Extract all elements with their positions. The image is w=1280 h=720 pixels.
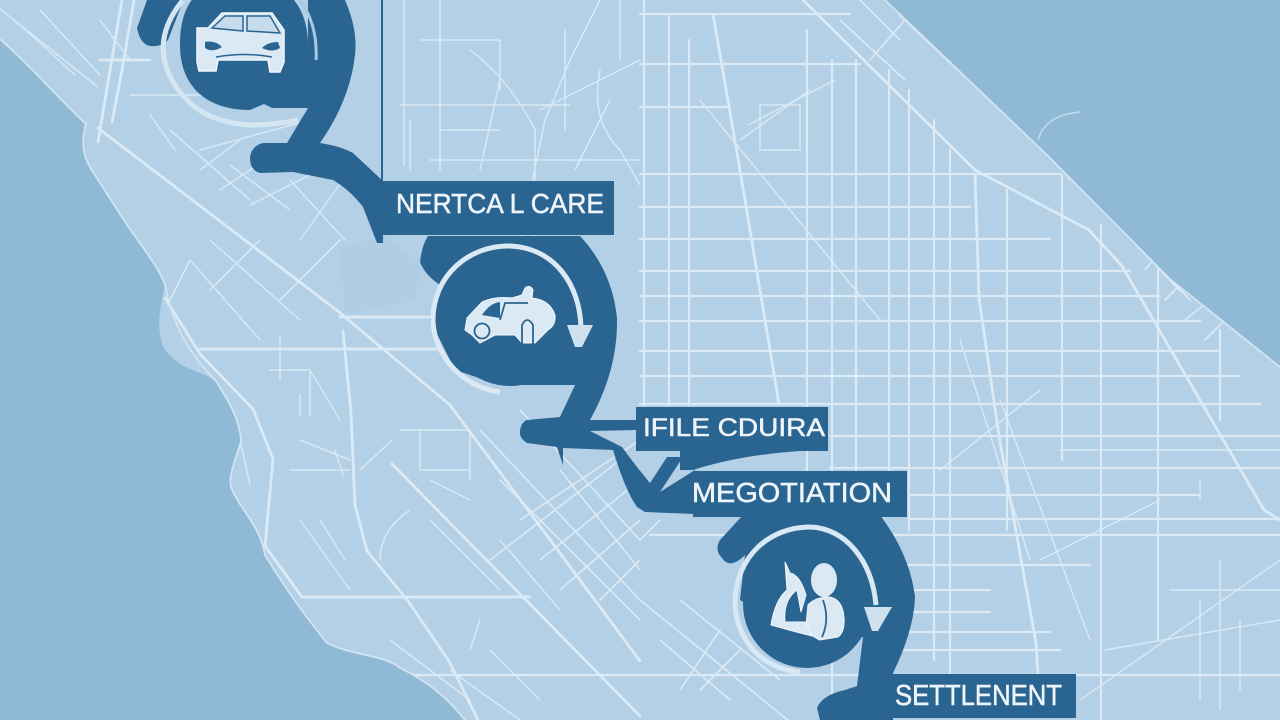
label: medical care: NERTCA L CARE xyxy=(396,188,604,219)
icon: car with person xyxy=(465,286,555,344)
vertical route line xyxy=(381,0,383,182)
label: file claim: IFILE CDUIRA xyxy=(643,414,825,442)
shaded land patch xyxy=(340,235,420,315)
icon: car xyxy=(197,13,284,72)
label: file claim xyxy=(636,407,828,451)
label: settlement xyxy=(893,674,1076,718)
dark disc xyxy=(444,254,576,386)
icon: person xyxy=(771,562,844,640)
curved arrow ring xyxy=(735,527,876,672)
dark disc xyxy=(743,540,871,668)
step 2: medical care marker xyxy=(380,181,695,514)
curved arrow ring xyxy=(433,246,581,392)
step 3: negotiation marker xyxy=(692,471,915,720)
offshore road arc xyxy=(1038,112,1080,140)
label: settlement: SETTLENENT xyxy=(895,680,1062,712)
label: medical care xyxy=(380,181,614,235)
arrowhead xyxy=(864,607,892,631)
step 1: accident marker xyxy=(137,0,383,243)
route band: middle section xyxy=(420,236,695,514)
label: negotiation: MEGOTIATION xyxy=(692,477,892,508)
swoosh connecting labels xyxy=(680,451,800,470)
white ring xyxy=(163,0,298,125)
route band: top section xyxy=(137,0,383,243)
label: negotiation xyxy=(692,471,907,517)
ring right side xyxy=(300,0,316,60)
dark disc xyxy=(180,0,308,110)
route band: lower section xyxy=(717,515,915,720)
arrowhead xyxy=(567,325,593,347)
